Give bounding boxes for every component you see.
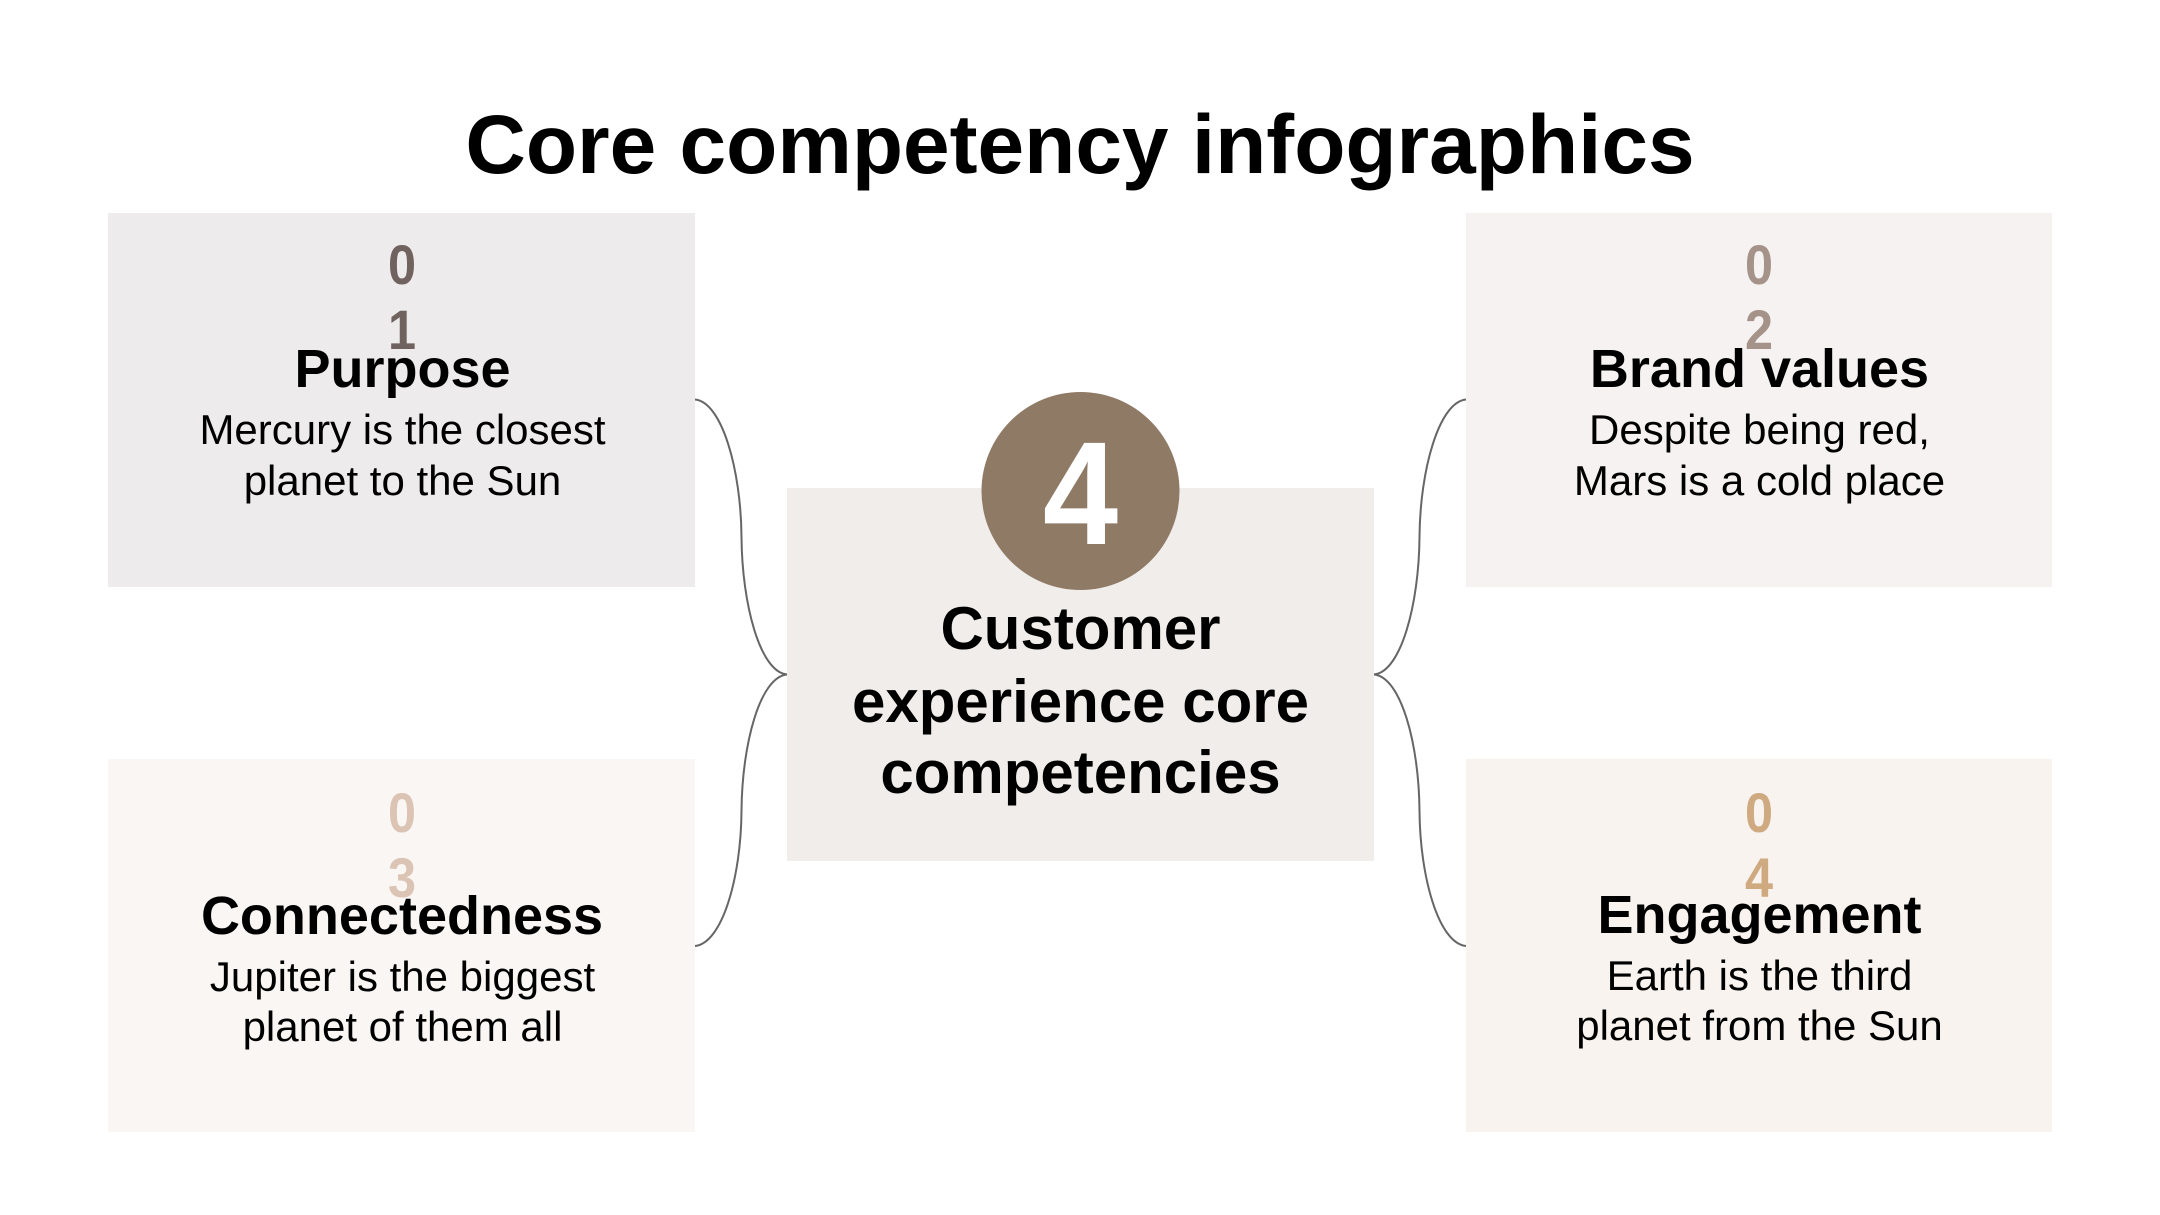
number 01: 0 (388, 235, 416, 297)
number 04: 0 (1745, 783, 1773, 845)
heading: connectedness: Connectedness (201, 886, 603, 946)
number 01: 1 (388, 300, 416, 362)
center heading (852, 595, 1309, 806)
number 02: 0 (1745, 235, 1773, 297)
description: brand values (1574, 406, 1945, 504)
connector: engagement to center (1374, 674, 1466, 946)
description: purpose: planet to the Sun (244, 457, 561, 504)
heading: engagement: Engagement (1597, 885, 1922, 945)
number 01 (388, 235, 416, 362)
description: connectedness: Jupiter is the biggest (210, 953, 595, 1000)
center heading: competencies (880, 739, 1281, 806)
panel: purpose (108, 213, 695, 587)
connector: brand values to center (1374, 400, 1466, 674)
panel: center (787, 392, 1374, 861)
description: purpose (199, 406, 606, 504)
description: connectedness (210, 953, 595, 1050)
panel: connectedness (108, 759, 695, 1132)
connector: purpose to center (695, 400, 787, 674)
panel: brand values (1466, 213, 2052, 587)
heading: purpose: Purpose (294, 339, 511, 399)
description: engagement (1576, 952, 1943, 1049)
heading: brand values: Brand values (1590, 339, 1929, 399)
number 03: 0 (388, 783, 416, 845)
number 02: 2 (1745, 300, 1773, 362)
title: Core competency infographics (465, 97, 1695, 191)
number 02 (1745, 235, 1773, 362)
center heading: Customer (940, 595, 1221, 662)
description: brand values: Despite being red, (1589, 406, 1930, 453)
center heading: experience core (852, 668, 1309, 735)
panel: engagement (1466, 759, 2052, 1132)
description: connectedness: planet of them all (243, 1003, 562, 1050)
description: purpose: Mercury is the closest (199, 406, 606, 453)
description: engagement: Earth is the third (1607, 952, 1912, 999)
center badge (982, 392, 1180, 590)
description: engagement: planet from the Sun (1576, 1002, 1943, 1049)
center badge: 4 (1043, 411, 1118, 575)
number 03: 3 (388, 848, 416, 910)
description: brand values: Mars is a cold place (1574, 457, 1945, 504)
number 03 (388, 783, 416, 910)
number 04 (1745, 783, 1773, 910)
connector: connectedness to center (695, 674, 787, 946)
number 04: 4 (1745, 848, 1773, 910)
